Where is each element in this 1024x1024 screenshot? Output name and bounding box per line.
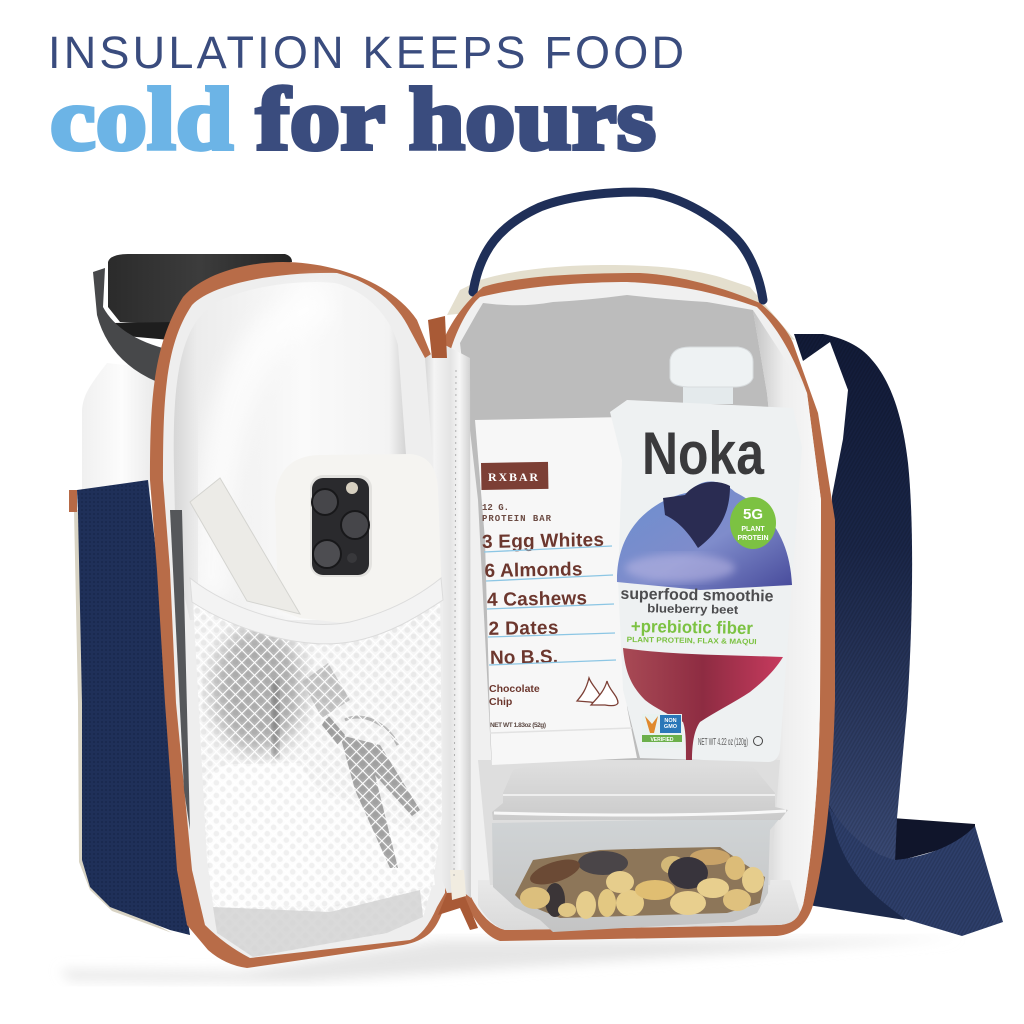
heading line 2: cold: cold: [50, 71, 233, 169]
centre gusset: [425, 345, 471, 898]
floor: [478, 880, 800, 930]
Noka pouch: NET WT 4.22 oz (120g): [698, 737, 748, 748]
verified badge: GMO: [664, 724, 678, 730]
ingredient list: 3 Egg Whites: [482, 530, 604, 553]
liner: [448, 282, 821, 930]
lower strap behind bag: [808, 800, 905, 920]
beige bag top: [447, 265, 795, 340]
green protein badge: PLANT: [741, 526, 765, 533]
right side wall: [753, 310, 821, 905]
blueberry crown: [663, 482, 730, 548]
product copy: [620, 586, 774, 646]
white mesh threads: [193, 585, 442, 957]
pouch neck: [683, 386, 733, 404]
bottle cap: [108, 254, 292, 325]
grey mesh cells: [193, 585, 442, 957]
pocket binding: [190, 578, 443, 644]
zipper outline left: [150, 262, 449, 968]
bottle handle: [93, 268, 170, 385]
protein copy: 12 G.: [482, 503, 509, 513]
padded insulation panel: [174, 282, 408, 620]
flavour: Chip: [489, 696, 512, 708]
flavour: [489, 683, 540, 708]
open lunch bag right compartment: [437, 273, 835, 941]
container base: [492, 818, 780, 932]
product copy: +prebiotic fiber: [631, 616, 753, 638]
pouch body: [610, 400, 802, 762]
chocolate chip icon: [577, 678, 618, 706]
ingredient list: 4 Cashews: [487, 588, 587, 611]
verified badge: VERIFIED: [650, 737, 674, 743]
ingredient list: [482, 530, 606, 669]
camera module: [310, 475, 372, 577]
pouch spout cap: [670, 347, 753, 387]
earbuds case: [207, 763, 326, 908]
pull tab strap: [190, 478, 300, 614]
product copy: superfood smoothie: [620, 586, 774, 605]
vertical strap band: [794, 334, 912, 862]
protein copy: [482, 503, 552, 524]
dark see-through shade: [212, 628, 304, 752]
protein copy: PROTEIN BAR: [482, 514, 552, 524]
RXBAR wrapper: RXBAR: [488, 470, 538, 484]
lower mesh fold: [213, 890, 423, 957]
shoulder strap: [794, 334, 1003, 936]
product copy: blueberry beet: [647, 601, 738, 617]
ground shadow: [60, 938, 960, 982]
title: [48, 27, 684, 169]
brand label: [481, 462, 548, 490]
strap dark inner loop: [892, 818, 975, 862]
mesh pocket: [190, 578, 443, 957]
navy mesh: [77, 480, 190, 935]
pocket background: [193, 585, 442, 957]
grey back wall: [460, 295, 778, 830]
door liner: [163, 273, 445, 958]
carry handle: [473, 192, 763, 300]
RXBAR wrapper: [475, 417, 637, 765]
ingredient list: 6 Almonds: [484, 559, 583, 582]
strap foot: [828, 805, 1003, 936]
rust corner at hinge: [428, 316, 447, 358]
rear mesh pocket: [69, 480, 190, 935]
ingredient list: No B.S.: [490, 647, 558, 669]
beige edge: [74, 510, 172, 933]
verified badge: NON: [664, 718, 677, 724]
green protein badge: PROTEIN: [737, 535, 769, 542]
container lid: [492, 765, 788, 820]
zipper outline right: [437, 273, 835, 941]
keys: [302, 663, 420, 868]
blue rule lines: [484, 546, 616, 665]
blueberry: [617, 482, 792, 590]
Noka pouch: [610, 347, 802, 762]
cap underside: [113, 322, 175, 340]
net weight: NET WT 1.83oz (52g): [490, 722, 546, 729]
left door: [150, 262, 478, 968]
phone: [275, 454, 442, 625]
dark gap strip: [170, 510, 190, 830]
rust tab: [69, 490, 77, 512]
green protein badge: [730, 497, 776, 549]
heading line 1: INSULATION KEEPS FOOD: [48, 27, 684, 78]
lower back wall: [478, 760, 780, 885]
padded panel highlight: [210, 300, 330, 600]
beet: [623, 648, 783, 760]
heading line 2: for hours: for hours: [256, 71, 656, 169]
flavour: Chocolate: [489, 683, 540, 695]
food container: [492, 765, 788, 932]
nuts: [515, 847, 765, 919]
bottle body: [82, 363, 170, 490]
verified badge: [642, 714, 682, 748]
product copy: PLANT PROTEIN, FLAX & MAQUI: [627, 635, 757, 646]
hinge tab: [450, 870, 466, 900]
crimp band: [490, 728, 632, 733]
green protein badge: 5G: [743, 506, 763, 523]
Noka logo: Noka: [642, 420, 765, 487]
stitch line: [454, 370, 456, 880]
blueberry highlight: [625, 554, 735, 582]
hinge bottom: [438, 892, 478, 930]
ingredient list: 2 Dates: [488, 618, 559, 640]
water bottle: [82, 254, 292, 490]
